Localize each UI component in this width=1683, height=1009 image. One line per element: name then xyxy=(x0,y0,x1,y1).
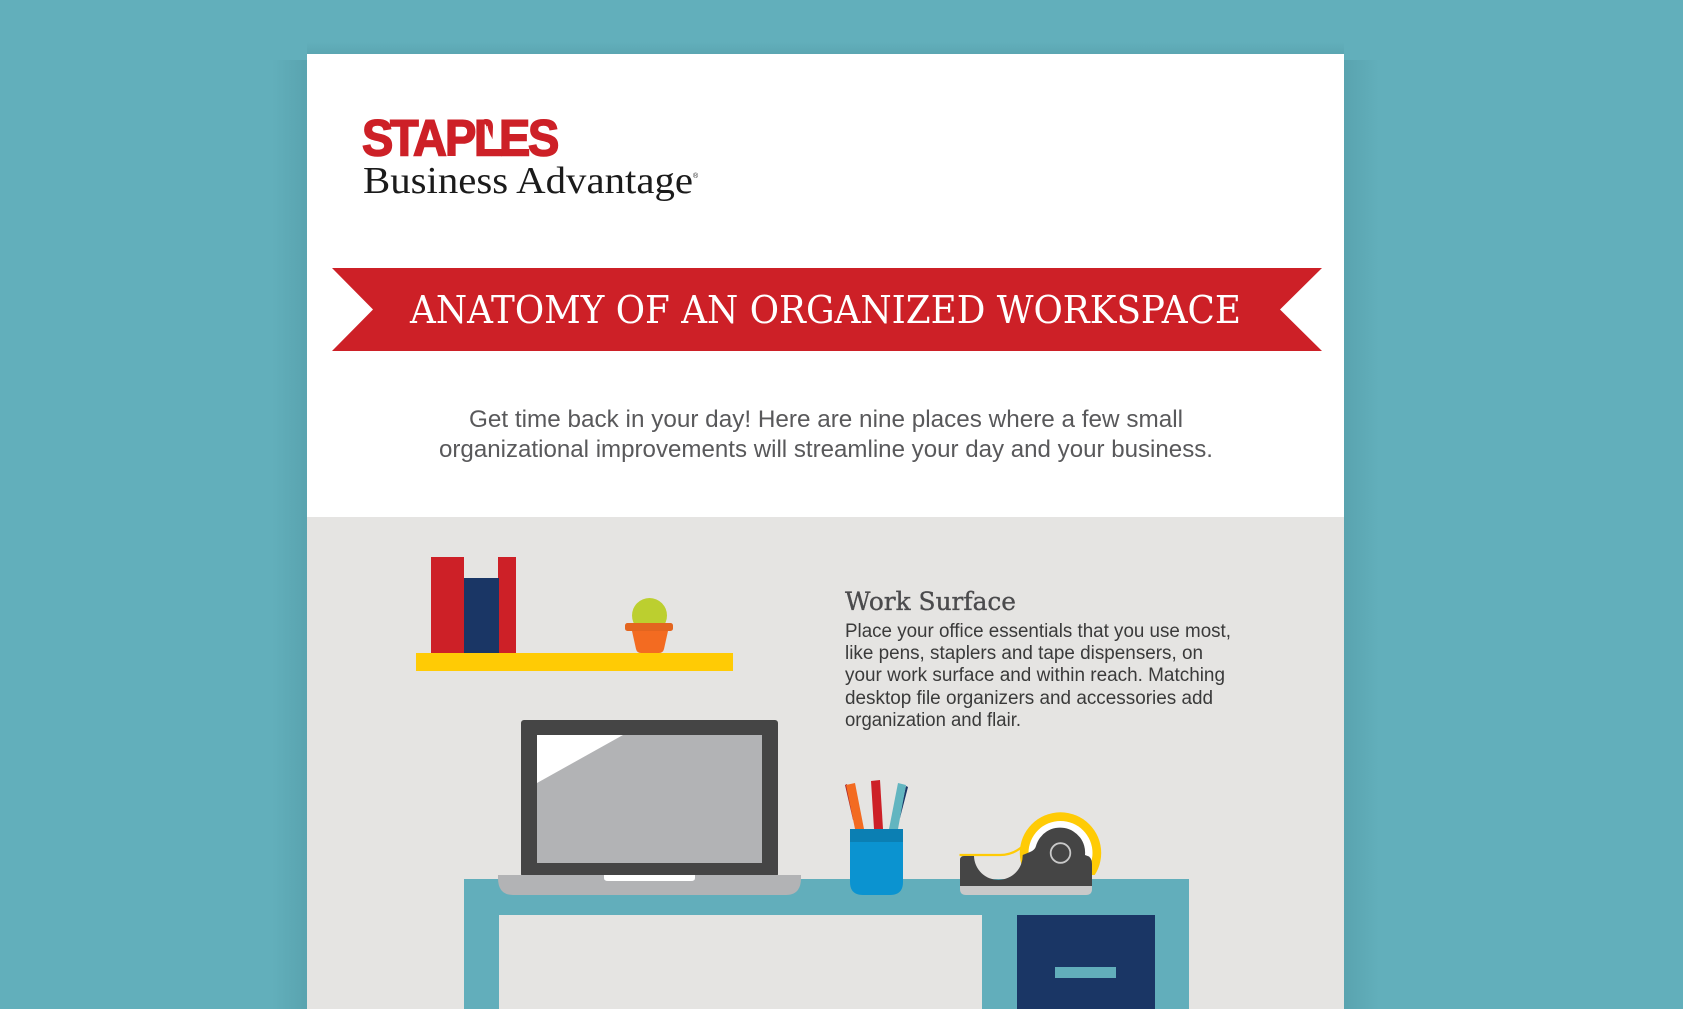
icon: pen cup xyxy=(845,780,908,895)
icon: tape dispenser xyxy=(960,812,1110,899)
intro text: organizational improvements will streamline your day and your business. xyxy=(439,436,1213,463)
body text: work surface xyxy=(845,621,1231,731)
banner ribbon xyxy=(332,268,1322,351)
icon: laptop xyxy=(498,720,801,895)
icon: potted cactus xyxy=(625,598,673,653)
desk drawer xyxy=(1017,915,1155,1009)
section: work surface text xyxy=(845,587,1231,731)
intro text xyxy=(439,406,1213,463)
title banner xyxy=(332,268,1322,351)
body text: work surface: organization and flair. xyxy=(845,710,1021,731)
icon: books xyxy=(431,557,516,653)
logo staple detail on L xyxy=(477,119,493,139)
logo tagline: Business Advantage: Business Advantage xyxy=(363,160,693,202)
logo xyxy=(362,111,699,202)
registered mark: ® xyxy=(693,172,699,180)
icon: wall shelf with books and cactus xyxy=(416,557,733,671)
body text: work surface: like pens, staplers and tape dispensers, on xyxy=(845,643,1203,664)
title: ANATOMY OF AN ORGANIZED WORKSPACE xyxy=(409,288,1241,332)
intro text: Get time back in your day! Here are nine places where a few small xyxy=(469,406,1183,433)
panel: gray workspace area xyxy=(307,517,1344,1009)
icon: desk xyxy=(464,879,1189,1009)
logo wordmark: Staples: STAPLES xyxy=(362,111,559,167)
body text: work surface: your work surface and within reach. Matching xyxy=(845,665,1225,686)
body text: work surface: Place your office essentials that you use most, xyxy=(845,621,1231,642)
body text: work surface: desktop file organizers and accessories add xyxy=(845,688,1213,709)
panel: white header card xyxy=(307,54,1344,517)
heading: work surface: Work Surface xyxy=(845,587,1016,617)
